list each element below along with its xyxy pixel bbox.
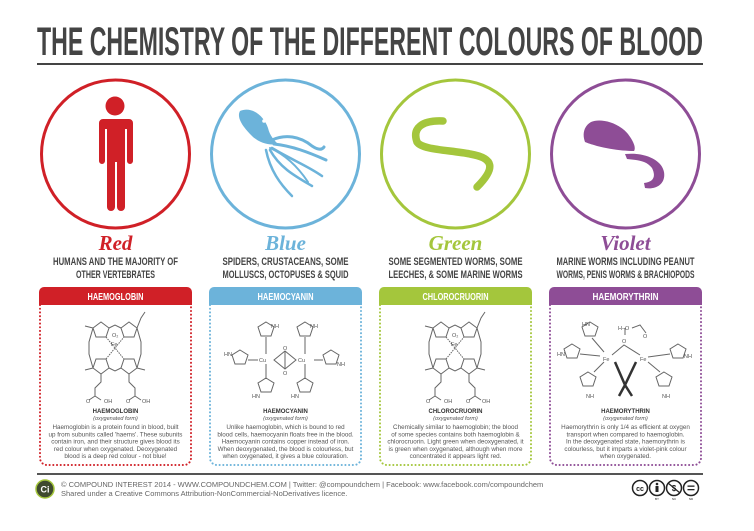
subtitle: blue organisms: SPIDERS, CRUSTACEANS, SOME — [222, 256, 348, 268]
structure: haemorythrin: HN — [557, 352, 565, 358]
text: haemoglobin description: up from subunits called 'haems'. These subunits — [49, 431, 182, 438]
structure: haemoglobin: O — [86, 399, 91, 405]
structure: chlorocruorin: O₂ — [452, 333, 458, 339]
structure: haemorythrin: O — [622, 339, 627, 345]
structure: haemorythrin: O — [643, 334, 648, 340]
subtitle: red organisms — [53, 256, 178, 281]
text: haemoglobin description: blood is a deep red colour - not blue! — [64, 453, 167, 460]
text: chlorocruorin description: chlorocruorin. Light green when deoxygenated, it — [387, 439, 524, 446]
text: chlorocruorin description: (oxygenated form) — [433, 416, 478, 422]
text: chlorocruorin description: CHLOROCRUORIN — [428, 409, 482, 415]
structure: haemoglobin: O — [126, 399, 131, 405]
text: haemocyanin description — [217, 409, 354, 460]
icon: CC licence: $ — [672, 484, 677, 493]
structure: haemocyanin: NH — [310, 324, 318, 330]
panel: chlorocruorin: CHLOROCRUORIN — [422, 292, 488, 303]
subtitle: green organisms: LEECHES, & SOME MARINE WORMS — [388, 269, 522, 281]
icon: CC licence: ND — [689, 497, 694, 501]
structure: haemorythrin: Fe — [640, 357, 646, 363]
subtitle: violet organisms — [556, 256, 695, 281]
text: chlorocruorin description: Chemically similar to haemoglobin; the blood — [393, 424, 518, 431]
footer text: © COMPOUND INTEREST 2014 - WWW.COMPOUNDCHEM.COM | Twitter: @compoundchem | Facebook: www.facebook.com/compoundchem — [61, 480, 543, 489]
structure: haemocyanin: Cu — [298, 358, 305, 364]
panel: chlorocruorin — [379, 287, 532, 465]
text: haemoglobin description: red colour when oxygenated. Deoxygenated — [54, 446, 178, 453]
structure: haemoglobin: OH — [142, 399, 150, 405]
structure: haemoglobin: OH — [104, 399, 112, 405]
structure: haemocyanin: O — [283, 346, 288, 352]
structure: chlorocruorin: OH — [444, 399, 452, 405]
subtitle: red organisms: OTHER VERTEBRATES — [76, 269, 155, 281]
structure: haemoglobin: Fe — [111, 342, 117, 348]
structure: haemorythrin — [557, 322, 692, 400]
text: haemoglobin description: (oxygenated form) — [93, 416, 138, 422]
text: haemorythrin description: (oxygenated form) — [603, 416, 648, 422]
structure: haemorythrin: NH — [684, 354, 692, 360]
text: chlorocruorin description: of some species contains both haemoglobin & — [391, 431, 521, 438]
text: haemoglobin description: Haemoglobin is a protein found in blood, built — [52, 424, 179, 431]
structure: haemorythrin: Fe — [603, 357, 609, 363]
subtitle: blue organisms: MOLLUSCS, OCTOPUSES & SQUID — [222, 269, 349, 281]
structure: haemorythrin: NH — [662, 394, 670, 400]
icon: CC licence: NC — [672, 497, 677, 501]
structure: chlorocruorin: O — [466, 399, 471, 405]
subtitle: violet organisms: MARINE WORMS INCLUDING PEANUT — [556, 256, 695, 268]
subtitle: red organisms: HUMANS AND THE MAJORITY OF — [53, 256, 178, 268]
structure: haemoglobin: O₂ — [112, 333, 118, 339]
footer text: Shared under a Creative Commons Attribution-NonCommercial-NoDerivatives licence. — [61, 489, 347, 498]
panel: haemocyanin — [209, 287, 362, 465]
text: haemocyanin description: Haemocyanin contains copper instead of iron. — [222, 439, 350, 446]
panel: haemorythrin — [549, 287, 702, 465]
structure: haemorythrin: NH — [586, 394, 594, 400]
structure: haemorythrin: H–O — [618, 326, 630, 332]
structure: chlorocruorin: O — [426, 399, 431, 405]
subtitle: blue organisms — [222, 256, 349, 281]
text: haemorythrin description: In the deoxygenated state, haemorythrin is — [566, 439, 685, 446]
text: haemocyanin description: when oxygenated, it gives a blue colouration. — [222, 453, 349, 460]
text: haemorythrin description: HAEMORYTHRIN — [601, 409, 650, 415]
footer text — [61, 480, 543, 498]
structure: haemocyanin: HN — [252, 394, 260, 400]
text: chlorocruorin description — [387, 409, 524, 460]
icon circle: red human — [42, 80, 190, 228]
panel: haemoglobin — [39, 287, 192, 465]
text: haemorythrin description: colourless, but it imparts a violet-pink colour — [564, 446, 687, 453]
structure: chlorocruorin: OH — [482, 399, 490, 405]
text: haemorythrin description: Haemorythrin is only 1/4 as efficient at oxygen — [561, 424, 690, 431]
icon: CC licence: BY — [655, 497, 659, 501]
text: haemocyanin description: Unlike haemoglobin, which is bound to red — [226, 424, 345, 431]
text: haemorythrin description — [561, 409, 690, 460]
panel: haemoglobin: HAEMOGLOBIN — [88, 292, 144, 303]
heading: Green: Green — [429, 231, 482, 255]
text: haemorythrin description: transport when compared to haemoglobin. — [567, 431, 685, 438]
structure: haemorythrin: HN — [582, 322, 590, 328]
text: haemoglobin description: contain iron, and their structure gives blood its — [51, 439, 180, 446]
text: haemocyanin description: (oxygenated form) — [263, 416, 308, 422]
structure: haemocyanin: NH — [271, 324, 279, 330]
icon circle: blue octopus — [212, 80, 360, 228]
icon: CC licence: cc — [636, 486, 644, 493]
subtitle: green organisms — [388, 256, 522, 281]
structure: haemocyanin: NH — [337, 362, 345, 368]
structure: haemoglobin — [85, 312, 150, 405]
text: haemocyanin description: HAEMOCYANIN — [263, 409, 308, 415]
text: haemoglobin description: HAEMOGLOBIN — [93, 409, 138, 415]
subtitle: green organisms: SOME SEGMENTED WORMS, SOME — [388, 256, 522, 268]
text: chlorocruorin description: concentrated it appears light red. — [410, 453, 502, 460]
structure: haemocyanin: Cu — [259, 358, 266, 364]
structure: haemocyanin: HN — [224, 352, 232, 358]
heading: Blue: Blue — [264, 231, 306, 255]
structure: chlorocruorin: Fe — [451, 342, 457, 348]
icon circle: green worm — [382, 80, 530, 228]
structure: chlorocruorin — [425, 312, 490, 405]
icon: Ci logo — [36, 480, 54, 498]
text: chlorocruorin description: is green when oxygenated, although when more — [388, 446, 523, 453]
structure: haemocyanin: O — [283, 371, 288, 377]
icon: CC licence — [632, 480, 698, 501]
structure: haemocyanin — [224, 322, 345, 400]
text: haemocyanin description: When deoxygenated, the blood is colourless, but — [218, 446, 354, 453]
text: haemocyanin description: blood cells, haemocyanin floats free in the blood. — [217, 431, 354, 438]
heading: Red: Red — [98, 231, 133, 255]
icon: Ci logo: Ci — [40, 484, 50, 494]
panel: haemorythrin: HAEMORYTHRIN — [592, 292, 658, 303]
text: haemoglobin description — [49, 409, 182, 460]
heading: Violet: Violet — [600, 231, 652, 255]
panel: haemocyanin: HAEMOCYANIN — [258, 292, 314, 303]
text: haemorythrin description: when oxygenated. — [599, 453, 651, 460]
structure: haemocyanin: HN — [291, 394, 299, 400]
icon circle: violet marine worm — [552, 80, 700, 228]
